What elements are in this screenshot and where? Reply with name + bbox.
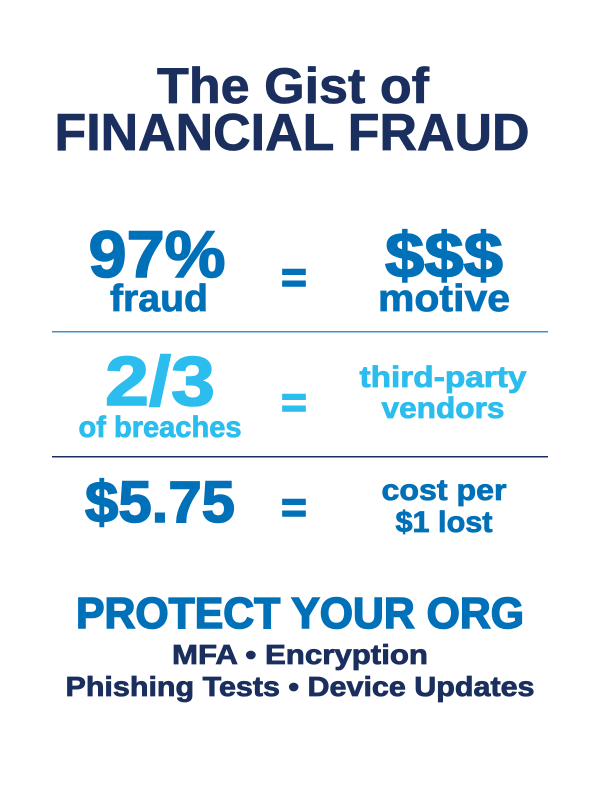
title: The Gist of — [157, 58, 429, 114]
row: 97% fraud = $$$ motive: motive — [378, 278, 510, 320]
row: 2/3 of breaches = third-party vendors: vendors — [382, 392, 504, 425]
row: $5.75 = cost per $1 lost: $1 lost — [396, 506, 493, 539]
row: 2/3 of breaches = third-party vendors: of breaches — [78, 411, 242, 444]
row: 2/3 of breaches = third-party vendors: = — [281, 378, 307, 427]
row: 97% fraud = $$$ motive: = — [281, 253, 307, 302]
row: 97% fraud = $$$ motive: 97% — [88, 217, 226, 291]
title: FINANCIAL FRAUD — [54, 104, 530, 162]
protect list — [66, 639, 534, 702]
row: $5.75 = cost per $1 lost: cost per — [382, 474, 507, 507]
protect list: MFA • Encryption — [172, 639, 428, 670]
row: 97% fraud = $$$ motive: fraud — [110, 278, 208, 320]
title — [54, 58, 530, 162]
protect heading: PROTECT YOUR ORG — [76, 589, 524, 638]
row: 2/3 of breaches = third-party vendors — [78, 342, 527, 444]
row: $5.75 = cost per $1 lost: = — [281, 483, 307, 532]
row: 2/3 of breaches = third-party vendors: third-party — [360, 361, 527, 394]
row: 97% fraud = $$$ motive — [88, 217, 510, 320]
row: $5.75 = cost per $1 lost — [85, 470, 507, 539]
row: 2/3 of breaches = third-party vendors: 2/3 — [105, 342, 215, 420]
row: $5.75 = cost per $1 lost: $5.75 — [85, 470, 235, 535]
protect list: Phishing Tests • Device Updates — [66, 671, 534, 702]
row: 97% fraud = $$$ motive: $$$ — [385, 219, 503, 291]
